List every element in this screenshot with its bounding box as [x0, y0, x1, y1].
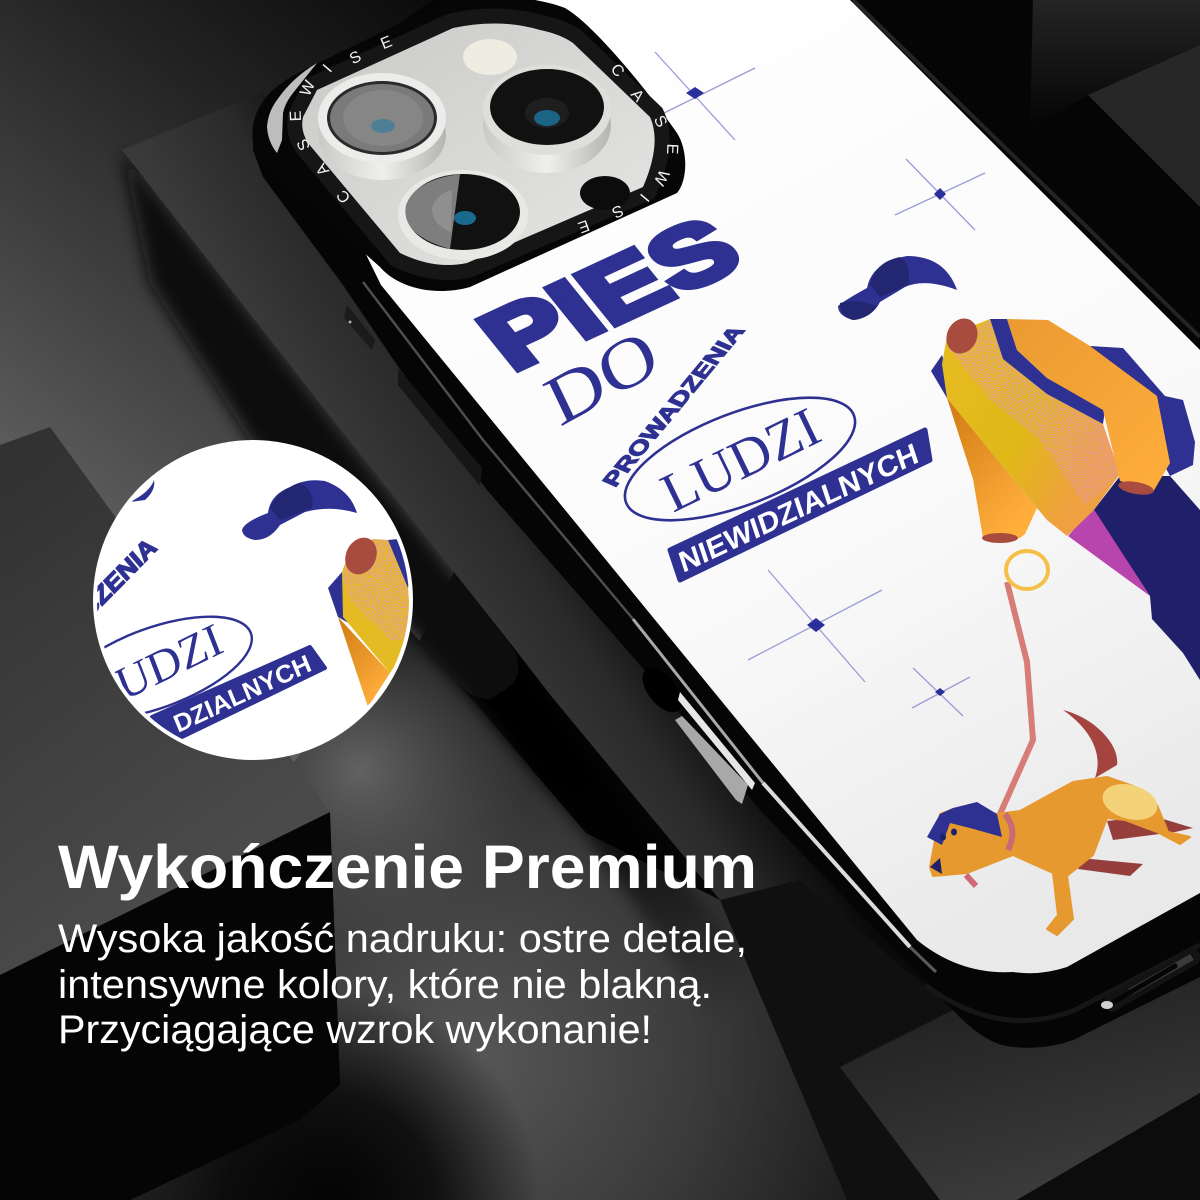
CASEWISE lettering on ring: A: [627, 86, 647, 106]
art: sparkles: [655, 52, 985, 716]
CASEWISE lettering on ring: E: [378, 33, 395, 53]
CASEWISE lettering on ring: E: [576, 216, 591, 236]
microphone: [580, 176, 630, 210]
camera module: [252, 0, 685, 291]
magnifier: NIEWIDZIALNYCH band: DZIALNYCH: [170, 651, 315, 739]
CASEWISE lettering on ring: S: [294, 136, 314, 153]
CASEWISE lettering on ring: S: [609, 201, 626, 221]
art title: LUDZI: LUDZI: [652, 396, 830, 525]
CASEWISE lettering on ring: C: [334, 186, 354, 206]
magnifier callout circle: [93, 440, 413, 760]
CASEWISE lettering on ring: E: [288, 110, 305, 122]
art: LUDZI ellipse: [624, 396, 856, 522]
art: sparkle centres: [686, 87, 946, 696]
art: dog: [927, 710, 1193, 935]
art title: PROWADZENIA: PROWADZENIA: [597, 322, 750, 490]
lettered ring band: [302, 23, 655, 265]
CASEWISE lettering on ring: A: [313, 160, 333, 179]
heading: Wykończenie Premium: [58, 833, 757, 901]
magnifier: cap: [242, 480, 357, 540]
CASEWISE lettering on ring: [288, 33, 680, 236]
art: leash and ring: [1000, 551, 1048, 814]
lens 3: [398, 170, 528, 260]
CASEWISE lettering on ring: W: [649, 167, 672, 189]
camera glass: [302, 23, 655, 265]
magnifier: jacket: [328, 532, 412, 707]
side button: action: [344, 305, 375, 350]
description text: Wysoka jakość nadruku: ostre detale,: [58, 917, 747, 961]
art: NIEWIDZIALNYCH band: NIEWIDZIALNYCH: [675, 438, 922, 580]
CASEWISE lettering on ring: E: [663, 143, 680, 155]
CASEWISE lettering on ring: C: [607, 61, 627, 81]
art title: DO: DO: [534, 315, 670, 441]
art: cap: [838, 256, 957, 320]
CASEWISE lettering on ring: W: [297, 77, 319, 99]
lens 2: [483, 65, 611, 173]
rim highlights: [363, 0, 1200, 1021]
case camera ring: [252, 0, 685, 291]
CASEWISE lettering on ring: S: [650, 113, 670, 131]
white printed back: [300, 0, 1200, 973]
CASEWISE lettering on ring: I: [320, 62, 336, 76]
side button: power silver: [635, 661, 755, 804]
CASEWISE lettering on ring: S: [347, 48, 364, 68]
description text: intensywne kolory, które nie blakną.: [58, 963, 712, 1007]
flash: [463, 39, 517, 75]
speaker port: [1101, 957, 1192, 1009]
magnifier: LUDZI: LUDZI: [82, 613, 229, 723]
magnifier: ellipse: [104, 616, 254, 714]
description text: [58, 917, 747, 1052]
art: walking man: [931, 313, 1200, 680]
side buttons: volume: [398, 368, 482, 486]
printed artwork: [460, 52, 1200, 935]
art title: PIES: PIES: [460, 200, 759, 388]
magnifier: cropped letters: [130, 480, 154, 502]
light crescent on ring: [267, 63, 317, 153]
magnifier callout circle: CZENIA: [74, 533, 162, 625]
lens 1: [318, 73, 446, 180]
description text: Przyciągające wzrok wykonanie!: [58, 1008, 652, 1052]
CASEWISE lettering on ring: I: [636, 190, 652, 204]
phone body with glossy black case: [253, 0, 1200, 1048]
